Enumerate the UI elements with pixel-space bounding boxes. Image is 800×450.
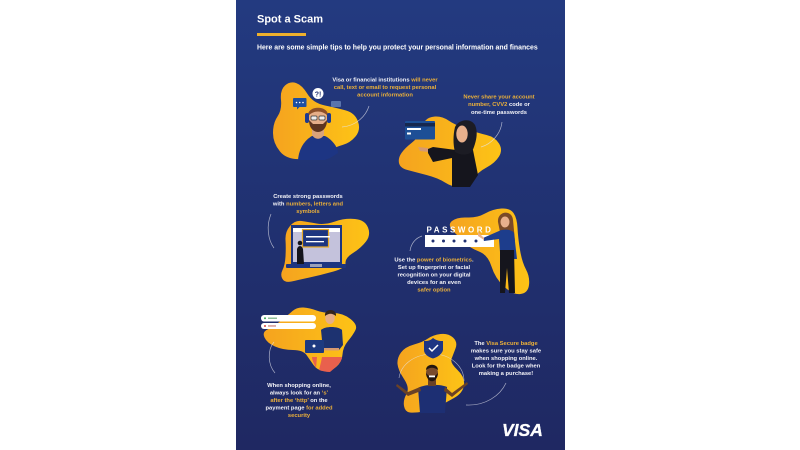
text block: The Visa Secure badge: [474, 341, 538, 347]
blob 3: [281, 219, 369, 282]
text block: recognition on your digital: [397, 272, 471, 278]
icon: shield badge: [424, 338, 443, 358]
icon: question bubble: ?!: [315, 91, 321, 98]
text block: Create strong passwords: [273, 194, 343, 200]
text block: call, text or email to request personal: [334, 85, 437, 91]
text block: Visa or financial institutions will never: [332, 78, 438, 84]
title: Spot a Scam: [257, 14, 323, 26]
title accent bar: [257, 33, 306, 36]
text block: with numbers, letters and: [273, 202, 343, 208]
callout curve: [410, 236, 422, 251]
callout curve: [268, 214, 274, 248]
text block: makes sure you stay safe: [471, 348, 542, 354]
icon: chat bubble: [293, 98, 306, 110]
callout curve: [269, 342, 275, 373]
password label: PASSWORD: [426, 226, 493, 234]
blob 2: [399, 116, 501, 187]
text block: making a purchase!: [479, 371, 533, 377]
text block: symbols: [296, 209, 320, 215]
password field: [425, 235, 494, 247]
callout curve: [466, 383, 506, 405]
text block: after the ‘http’ on the: [270, 398, 328, 404]
icon: smiling man: [396, 365, 468, 413]
text block: Set up fingerprint or facial: [398, 265, 470, 271]
callout curve: [481, 122, 502, 147]
Visa logo: VISA: [502, 420, 543, 440]
icon: laptop: [286, 225, 346, 268]
panel: https: [261, 307, 356, 419]
text block: account information: [357, 92, 413, 98]
text block: Never share your account: [463, 94, 535, 100]
text block: always look for an ‘s’: [270, 390, 328, 396]
callout curve: [342, 106, 369, 127]
icon: woman presenting: [478, 213, 517, 293]
panel: never request information: [273, 78, 438, 160]
blob 6: [397, 334, 464, 413]
text block: When shopping online,: [267, 383, 331, 389]
icon: question bubble: [312, 88, 324, 99]
blob 1: [273, 82, 359, 159]
icon: bank card: [405, 121, 435, 140]
text block: one-time passwords: [471, 110, 527, 116]
text block: devices for an even: [407, 280, 461, 286]
panel: strong passwords: [268, 194, 369, 282]
background panel: [236, 0, 565, 450]
text block: number, CVV2 code or: [468, 102, 530, 108]
blob 5: [264, 307, 356, 371]
subtitle: Here are some simple tips to help you protect your personal information and finances: [257, 44, 538, 52]
text block: Look for the badge when: [472, 364, 541, 370]
text block: safer option: [417, 288, 451, 294]
icon: woman in hijab: [418, 120, 478, 187]
table: [312, 357, 342, 372]
panel: biometrics: [394, 208, 529, 294]
icon: agent with headset: [298, 106, 338, 160]
panel: never share details: [399, 94, 535, 187]
text block: payment page for added: [265, 406, 333, 412]
text block: when shopping online.: [474, 356, 538, 362]
blob 4: [450, 208, 529, 294]
panel: visa secure: [396, 334, 542, 413]
address bars: [261, 315, 316, 329]
text block: Use the power of biometrics.: [394, 258, 474, 264]
icon: man with laptop: [305, 310, 343, 353]
icon: message bubble: [331, 101, 341, 107]
text block: security: [288, 413, 311, 419]
callout arc: [399, 354, 464, 381]
